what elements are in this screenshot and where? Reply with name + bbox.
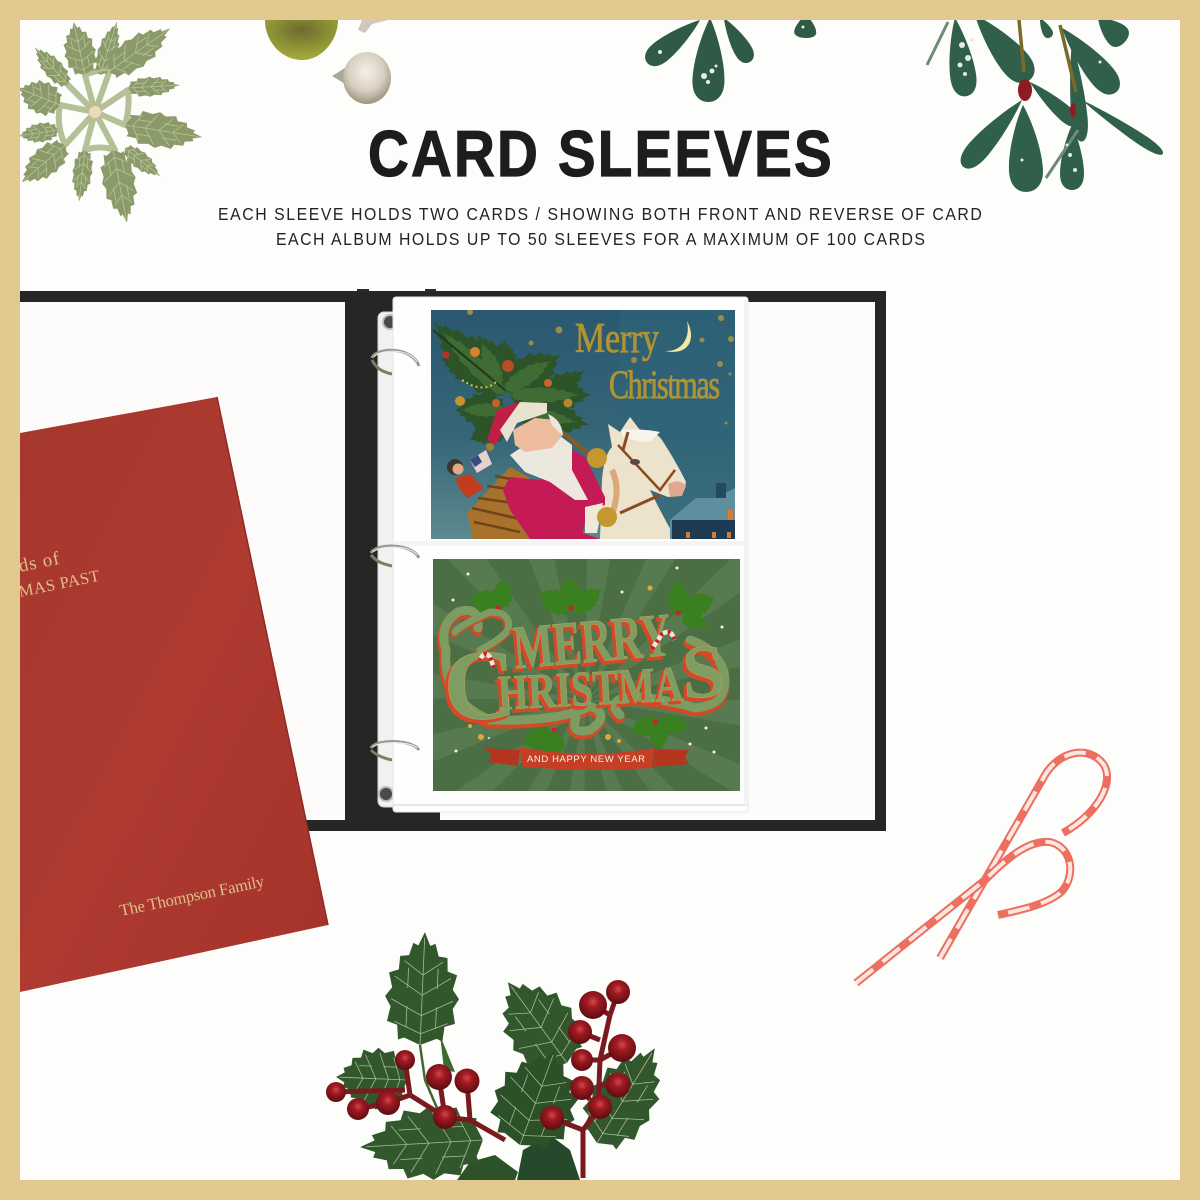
ribbon banner: [484, 747, 689, 770]
MERRY lettering: MERRY: [508, 604, 671, 686]
MERRY lettering: MERRY: [511, 601, 674, 683]
Christmas tree: [432, 322, 592, 444]
binder rings: [371, 350, 419, 760]
right inner page: [440, 302, 875, 820]
Merry Christmas lettering: Christmas: [609, 362, 720, 407]
loose-leaf sheet: [378, 312, 400, 807]
album title: [20, 550, 98, 597]
silver ornament top hook: [358, 20, 388, 33]
berry stems: [336, 992, 622, 1178]
title: CARD SLEEVES: [368, 117, 832, 190]
album title: MAS PAST: [17, 566, 101, 601]
twinkle stars: [452, 566, 724, 754]
subtitle: [218, 204, 982, 249]
CHRISTMAS lettering shadow: C: [438, 631, 516, 746]
spine ridges: [357, 289, 436, 292]
CHRISTMAS lettering: S: [680, 629, 727, 715]
flourish swirls: [443, 610, 725, 734]
crescent moon: [665, 321, 691, 352]
family name: The Thompson Family: [118, 871, 266, 920]
candy cane: small: [856, 842, 1070, 983]
mistletoe left sprig: [640, 11, 817, 102]
red berries: [326, 980, 636, 1130]
Merry Christmas lettering: [576, 324, 720, 399]
candy cane accents: [480, 632, 674, 668]
left inner page: [20, 302, 345, 820]
CHRISTMAS lettering shadow: HRISTMA: [494, 658, 681, 724]
sunburst rays: [433, 559, 740, 791]
ribbon text: AND HAPPY NEW YEAR: [527, 754, 645, 765]
mistletoe right sprig: [927, 5, 1166, 193]
holly sprig with berries: [326, 930, 683, 1184]
Santa: [486, 401, 617, 539]
holly leaves: [335, 930, 683, 1184]
open binder: [20, 289, 886, 831]
candy cane: large: [940, 753, 1107, 958]
horse: [600, 417, 686, 539]
CHRISTMAS lettering shadow: S: [677, 632, 724, 718]
card: vintage Santa: [418, 308, 735, 539]
Santa's basket and toys: [447, 450, 532, 539]
Merry Christmas lettering: Merry: [575, 316, 660, 362]
snowy village: [670, 483, 735, 539]
card: green Merry Christmas: [433, 559, 740, 791]
CHRISTMAS lettering: HRISTMA: [497, 655, 684, 721]
subtitle: EACH SLEEVE HOLDS TWO CARDS / SHOWING BOTH FRONT AND REVERSE OF CARD: [218, 204, 982, 224]
album title: ds of: [17, 548, 62, 577]
snowflake ornament: [12, 15, 205, 226]
MERRY lettering: [509, 614, 669, 673]
stars: [467, 309, 734, 424]
red album cover: [17, 397, 328, 992]
card sleeve: [393, 297, 748, 812]
subtitle: EACH ALBUM HOLDS UP TO 50 SLEEVES FOR A MAXIMUM OF 100 CARDS: [276, 229, 925, 249]
candy canes: [856, 753, 1107, 983]
CHRISTMAS lettering: C: [441, 628, 519, 743]
pearl ornament: [332, 52, 391, 104]
holly sprigs: [465, 576, 720, 761]
green ornament: [265, 20, 338, 60]
